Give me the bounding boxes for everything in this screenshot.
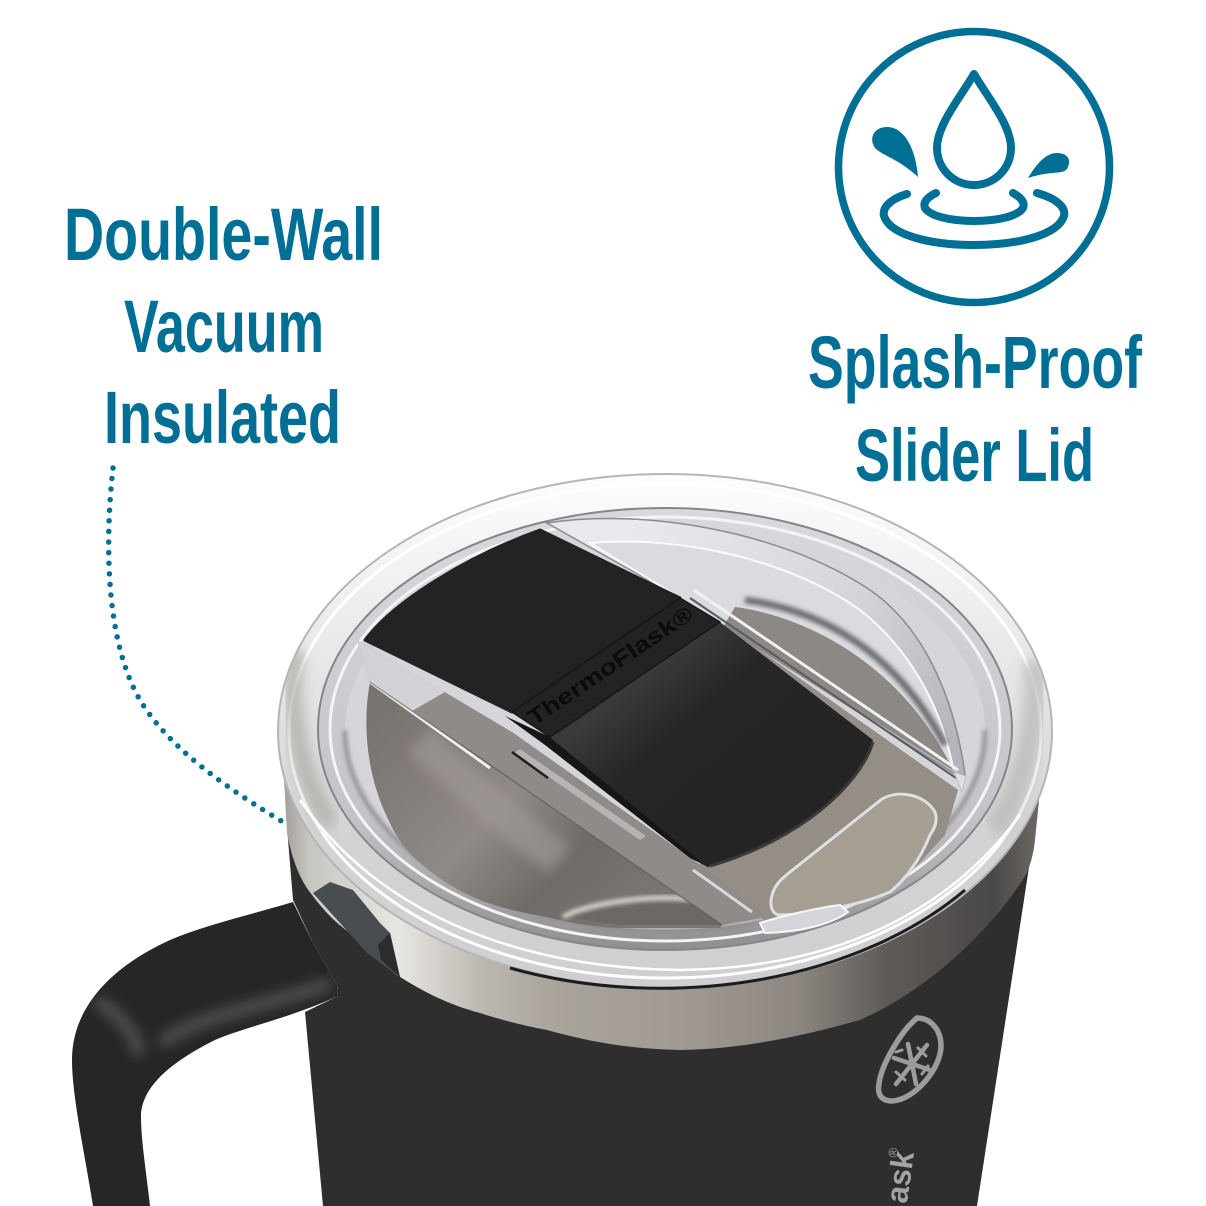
mug body	[284, 780, 1040, 1206]
clear divider rail	[357, 640, 768, 925]
heading: splash-proof slider lid: Slider Lid	[855, 414, 1094, 497]
heading: double-wall vacuum insulated: Insulated	[104, 376, 341, 459]
lid recess	[345, 530, 985, 930]
heading: double-wall vacuum insulated: Vacuum	[124, 285, 324, 368]
steel floor, right side	[700, 608, 958, 925]
metal band	[284, 780, 1040, 1050]
icon: water drop splash in circle	[838, 32, 1110, 302]
steel floor, left side	[366, 682, 722, 928]
lid mid ring	[318, 508, 1012, 950]
brand wordmark on body: ask	[879, 1148, 921, 1205]
clear upper rail	[547, 518, 965, 778]
brand wordmark on body: ®	[885, 1146, 901, 1158]
slider front section	[550, 622, 873, 867]
lid outer rim	[278, 474, 1052, 988]
clear lid	[278, 474, 1052, 988]
drinking opening	[771, 794, 936, 915]
cold logo on body	[879, 1018, 941, 1101]
slider ridge with brand	[512, 598, 720, 737]
heading: double-wall vacuum insulated: Double-Wall	[64, 193, 383, 276]
slider back section	[365, 530, 680, 712]
right latch corner	[954, 772, 966, 792]
rim side shading	[293, 650, 1035, 830]
clear lip under opening	[760, 905, 848, 933]
dotted leader line	[109, 468, 283, 822]
mug handle	[72, 902, 338, 1206]
heading: double-wall vacuum insulated	[64, 193, 383, 459]
slider ridge with brand: ThermoFlask®	[523, 601, 698, 730]
handle reflection on band	[313, 882, 400, 977]
slider shadow edge	[505, 716, 710, 868]
heading: splash-proof slider lid	[808, 321, 1142, 497]
